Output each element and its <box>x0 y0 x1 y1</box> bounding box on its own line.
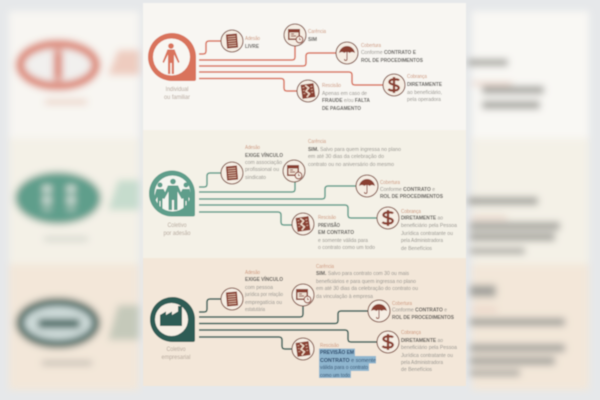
rescisão text: o contrato como um todo <box>318 245 375 251</box>
caption <box>164 87 190 101</box>
caption <box>164 223 191 237</box>
rescisão text: EM CONTRATO <box>318 230 355 236</box>
central infographic <box>143 3 466 386</box>
carência text: da vinculação à empresa <box>316 294 373 300</box>
carência text: em até 30 dias da celebração do contrato ou <box>316 286 418 292</box>
rescisão text with selection highlight: Rescisão <box>320 343 339 349</box>
adesão text: EXIGE VÍNCULO <box>245 275 284 283</box>
caption <box>162 347 190 361</box>
cobertura text: Cobertura <box>392 301 412 307</box>
icon: adesão <box>221 288 243 310</box>
rescisão text: DE PAGAMENTO <box>322 106 362 112</box>
cobrança text: Cobrança <box>401 330 421 336</box>
icon: carência <box>283 160 305 182</box>
adesão text: estatutária <box>245 307 265 313</box>
icon: cobertura <box>368 300 390 322</box>
icon: carência <box>292 284 314 306</box>
caption: por adesão <box>164 231 191 237</box>
cobertura text: Conforme CONTRATO E <box>361 50 416 56</box>
carência text <box>308 29 326 43</box>
cobertura text <box>380 180 443 200</box>
cobrança text: DIRETAMENTE <box>407 82 442 88</box>
carência text <box>308 139 401 168</box>
cobrança text: Jurídica contratante ou <box>401 231 453 237</box>
icon: group pin <box>149 171 195 216</box>
adesão text: EXIGE VÍNCULO <box>245 151 284 159</box>
cobrança text: beneficiário pela Pessoa <box>401 223 457 229</box>
connector lines <box>199 299 377 349</box>
cobertura text: Cobertura <box>380 180 400 186</box>
rescisão text: Rescisão <box>318 215 336 221</box>
panel: coletivo empresarial <box>143 258 466 386</box>
icon: factory pin <box>150 297 195 342</box>
rescisão text: FRAUDE e/ou FALTA <box>322 98 370 104</box>
adesão text: profissional ou <box>245 167 279 173</box>
icon: cobertura <box>336 42 358 64</box>
carência text: Carência <box>316 264 334 270</box>
rescisão text: e somente válida para <box>318 238 368 244</box>
adesão text: jurídica por relação <box>244 292 283 298</box>
caption: Coletivo <box>166 347 186 353</box>
icon: adesão <box>221 162 243 184</box>
adesão text <box>245 145 284 181</box>
cobrança text: DIRETAMENTE ao <box>401 338 443 344</box>
cobrança text: pela operadora <box>407 97 441 103</box>
cobrança text: Cobrança <box>407 74 427 80</box>
cobertura text <box>392 301 454 321</box>
blurred right backdrop panel <box>468 11 589 390</box>
cobrança text <box>407 74 442 103</box>
cobertura text: Conforme CONTRATO e <box>392 308 447 314</box>
cobrança text: pela Administradora <box>401 238 443 244</box>
rescisão text <box>322 83 370 112</box>
cobrança text: DIRETAMENTE ao <box>401 216 443 222</box>
carência text: SIM <box>308 37 317 43</box>
cobrança text: ao beneficiário, <box>407 90 442 96</box>
icon: cobrança <box>377 207 399 229</box>
icon: rescisão <box>297 80 319 102</box>
cobrança text: pela Administradora <box>401 360 443 366</box>
caption: ou familiar <box>164 95 190 101</box>
carência text <box>316 264 418 300</box>
adesão text: Adesão <box>245 145 260 151</box>
cobrança text <box>401 330 457 373</box>
icon: person pin <box>148 33 196 81</box>
icon: rescisão <box>292 338 314 360</box>
panel: individual ou familiar <box>143 3 466 130</box>
rescisão text with selection highlight: como um todo <box>320 373 350 379</box>
adesão text: com pessoa <box>245 285 273 291</box>
rescisão text with selection highlight: PREVISÃO EM <box>320 349 354 356</box>
caption: Individual <box>166 87 188 93</box>
adesão text: com associação <box>245 160 282 166</box>
adesão text: sindicato <box>245 175 266 181</box>
rescisão text: Rescisão <box>322 83 341 89</box>
carência text: contrato ou no aniversário do mesmo <box>308 162 394 168</box>
rescisão text <box>318 215 375 251</box>
rescisão text with selection highlight <box>319 343 376 379</box>
cobertura text: ROL DE PROCEDIMENTOS <box>361 58 423 64</box>
adesão text <box>244 270 284 313</box>
adesão text <box>245 36 260 50</box>
icon: cobertura <box>356 175 378 197</box>
cobertura text <box>361 43 423 64</box>
cobertura text: Conforme CONTRATO e <box>380 187 435 193</box>
icon: adesão <box>221 30 243 52</box>
icon: cobrança <box>383 74 405 96</box>
carência text: Carência <box>308 139 326 145</box>
cobrança text: Cobrança <box>401 209 421 215</box>
cobertura text: ROL DE PROCEDIMENTOS <box>380 194 443 200</box>
cobrança text: de Benefícios <box>401 367 432 373</box>
caption: Coletivo <box>168 223 187 229</box>
blurred left backdrop panel <box>9 11 139 390</box>
rescisão text: Apenas em caso de <box>322 91 367 97</box>
cobrança text <box>401 209 457 252</box>
carência text: SIM. Salvo para quem ingressa no plano <box>308 147 401 153</box>
cobertura text: Cobertura <box>361 43 381 49</box>
cobrança text: Jurídica contratante ou <box>401 353 453 359</box>
connector lines <box>199 173 377 225</box>
rescisão text with selection highlight: válida para o contrato <box>320 365 368 371</box>
rescisão text with selection highlight: CONTRATO e somente <box>320 358 376 364</box>
cobrança text: de Benefícios <box>401 246 432 252</box>
adesão text: Adesão <box>245 36 260 42</box>
icon: rescisão <box>292 213 314 235</box>
carência text: Carência <box>308 29 326 35</box>
adesão text: Adesão <box>245 270 260 276</box>
cobertura text: ROL DE PROCEDIMENTOS <box>392 315 454 321</box>
connector lines <box>199 41 383 91</box>
adesão text: LIVRE <box>245 44 259 50</box>
carência text: SIM. Salvo para contrato com 30 ou mais <box>316 271 409 277</box>
carência text: em até 30 dias da celebração do <box>308 154 384 160</box>
caption: empresarial <box>162 355 190 361</box>
adesão text: empregatícia ou <box>245 300 282 306</box>
icon: carência <box>284 24 306 46</box>
cobrança text: beneficiário pela Pessoa <box>401 345 457 351</box>
rescisão text: PREVISÃO <box>318 222 340 229</box>
icon: cobrança <box>377 331 399 353</box>
carência text: beneficiários e para quem ingressa no plano <box>316 279 416 285</box>
panel: coletivo por adesão <box>143 130 466 258</box>
